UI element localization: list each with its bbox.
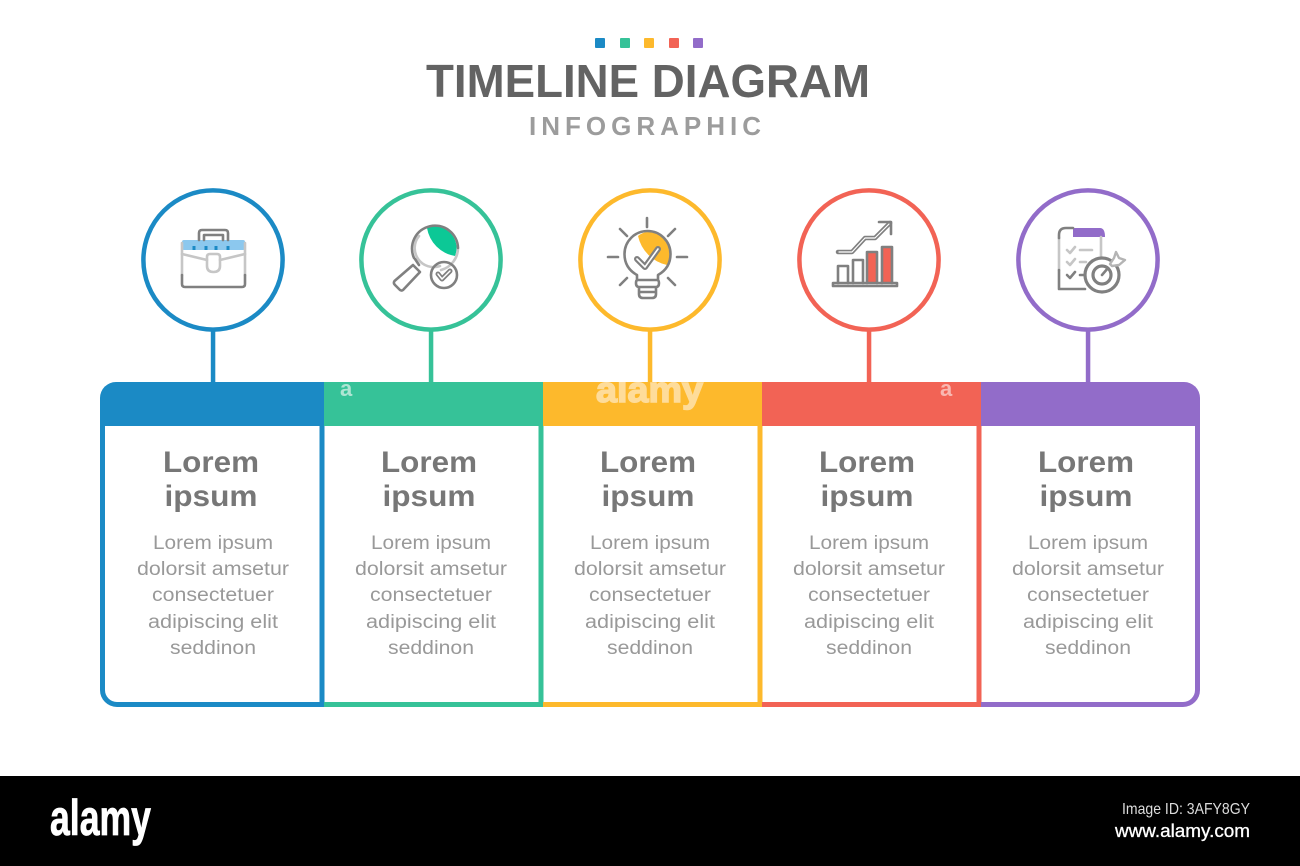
body text: adipiscing elit [585,612,716,633]
body text: adipiscing elit [1023,612,1154,633]
body text: Lorem ipsum [371,533,491,554]
step 3: yellow [543,190,762,704]
body text: consectetuer [1027,585,1150,606]
icon: magnifier with check [394,226,458,290]
step 2: green [324,190,543,704]
body text: adipiscing elit [804,612,935,633]
image id: Image ID: 3AFY8GY [1122,801,1250,818]
body text: Lorem ipsum [809,533,929,554]
body text: dolorsit amsetur [355,559,508,580]
footer bar [0,776,1300,866]
heading: Lorem [819,446,915,479]
heading: ipsum [1040,480,1132,513]
body text: adipiscing elit [148,612,279,633]
body text: seddinon [170,638,256,659]
watermark in yellow header: alamy [596,369,703,410]
alamy logo: alamy [50,790,151,846]
body text: consectetuer [370,585,493,606]
heading [163,446,259,513]
title: TIMELINE DIAGRAM [426,55,870,107]
subtitle: INFOGRAPHIC [529,111,761,141]
connector and circle [580,190,720,384]
body text: consectetuer [152,585,275,606]
body text: dolorsit amsetur [793,559,946,580]
icon: rising bar chart [833,222,897,286]
watermark letter in red header: a [940,376,953,401]
panel: column 2 [324,382,543,704]
step 1: blue [100,190,324,704]
body text [1012,533,1165,659]
panel: column 5 [981,382,1200,704]
heading [1038,446,1134,513]
body text: Lorem ipsum [153,533,273,554]
body text: seddinon [826,638,912,659]
body text [574,533,727,659]
body text: Lorem ipsum [590,533,710,554]
heading: ipsum [820,480,914,513]
body text: seddinon [388,638,474,659]
panel: column 4 [762,382,981,704]
connector and circle [361,190,501,384]
body text: dolorsit amsetur [1012,559,1165,580]
body text: seddinon [1045,638,1131,659]
icon: light bulb with check [608,218,687,298]
body text [137,533,290,659]
connector and circle [143,190,283,384]
website: www.alamy.com [1114,821,1250,841]
colour dots [595,38,703,48]
heading: Lorem [163,446,259,479]
heading: ipsum [164,480,258,513]
body text: seddinon [607,638,693,659]
body text: Lorem ipsum [1028,533,1148,554]
heading: ipsum [602,480,694,513]
connector and circle [799,190,939,384]
heading [600,446,696,513]
heading: Lorem [381,446,477,479]
body text: consectetuer [808,585,931,606]
icon: checklist with target [1059,228,1125,292]
watermark letter in green header: a [340,376,353,401]
panel: column 3 [543,382,762,704]
body text [355,533,508,659]
body text: dolorsit amsetur [137,559,290,580]
heading: ipsum [382,480,476,513]
body text: consectetuer [589,585,712,606]
heading: Lorem [1038,446,1134,479]
heading: Lorem [600,446,696,479]
heading [819,446,915,513]
body text: adipiscing elit [366,612,497,633]
step 5: purple [981,190,1200,704]
icon: briefcase [182,230,245,287]
heading [381,446,477,513]
step 4: red [762,190,981,704]
body text [793,533,946,659]
body text: dolorsit amsetur [574,559,727,580]
connector and circle [1018,190,1158,384]
panel: column 1 [100,382,324,704]
